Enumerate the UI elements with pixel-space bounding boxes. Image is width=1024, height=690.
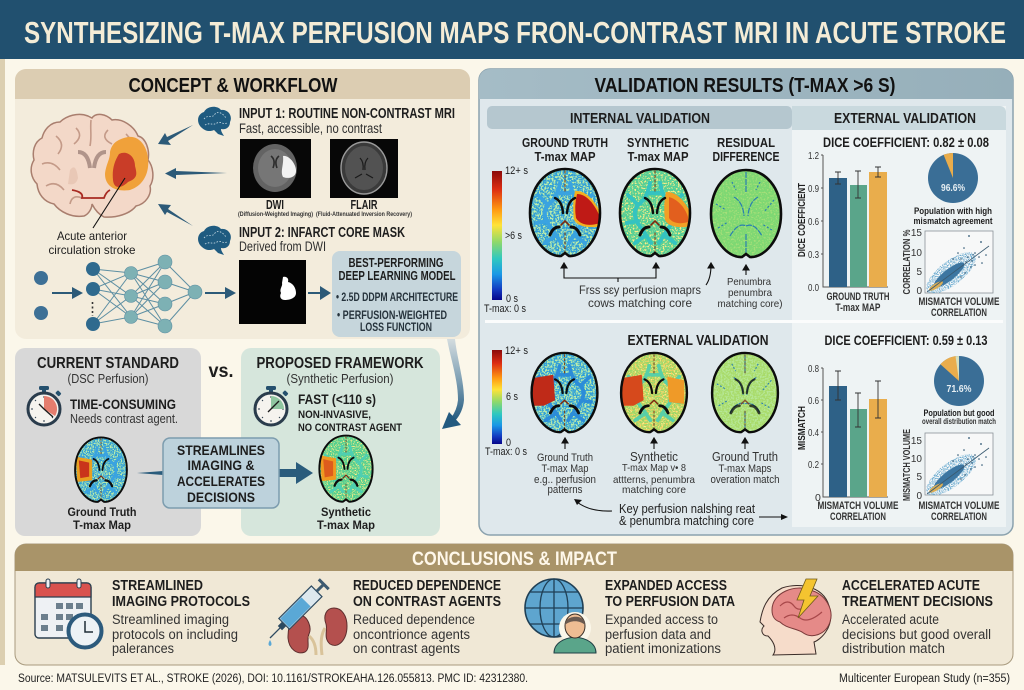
text: fast, non-invasive: FAST (<110 s)	[298, 392, 376, 407]
diagram: neural network	[34, 255, 202, 333]
colour scale: internal: T-max: 0 s	[484, 303, 526, 315]
scatter plot: mismatch volume	[902, 429, 1000, 523]
arrow: ground truth to synthetic	[137, 462, 313, 484]
caption: internal perfusion maps	[579, 283, 701, 310]
image: infarct core mask	[239, 260, 306, 324]
input 1 text: INPUT 1: ROUTINE NON-CONTRAST MRI	[239, 106, 455, 122]
text: reduced dependence: oncontrionce agents	[353, 627, 470, 642]
heading: proposed framework	[256, 355, 424, 386]
text: accelerated acute: Accelerated acute	[842, 612, 939, 627]
text: expanded access: Expanded access to	[605, 612, 718, 627]
text: reduced dependence: Reduced dependence	[353, 612, 475, 627]
icon: calendar and clock	[35, 579, 102, 648]
colour scale: external	[485, 345, 528, 458]
label: vs: vs.	[208, 361, 234, 382]
bar chart: dice coefficient: T-max MAP	[836, 302, 880, 314]
text: reduced dependence: on contrast agents	[353, 641, 460, 656]
text: fast, non-invasive	[298, 392, 402, 434]
scatter plot: mismatch volume: CORRELATION	[931, 511, 987, 523]
heading: current standard	[37, 355, 179, 386]
colour scale: internal: >6 s	[505, 230, 522, 242]
caption: external ground truth: patterns	[548, 484, 583, 496]
brain map: ground truth thumbnail	[74, 436, 128, 503]
icon: head with lightning brain	[760, 579, 831, 655]
annotation: key perfusion	[574, 499, 788, 528]
caption: ground truth map	[68, 505, 136, 532]
caption: penumbra: penumbra	[728, 287, 772, 299]
footer: study note: Multicenter European Study (n=355)	[839, 673, 1010, 685]
brain map: synthetic thumbnail	[318, 434, 374, 503]
bar chart: dice coefficient	[797, 150, 890, 314]
scatter plot: correlation: 10	[911, 248, 922, 259]
bar chart: mismatch: 0.6	[808, 395, 819, 407]
callout: best-performing model	[332, 251, 461, 337]
text: expanded access: patient imonizations	[605, 641, 721, 656]
heading: conclusions: CONCLUSIONS & IMPACT	[412, 549, 617, 570]
pie chart: 96.6%: Population with high	[914, 206, 992, 217]
caption: synthetic map	[317, 505, 375, 532]
input 2 text	[239, 225, 405, 254]
scatter plot: correlation: 5	[916, 267, 922, 278]
panel: concept and workflow	[15, 69, 470, 339]
metrics: internal dice headline: DICE COEFFICIENT: 0.82 ± 0.08	[823, 135, 989, 150]
callout: best-performing model: DEEP LEARNING MODEL	[338, 268, 456, 283]
bar: external validation	[792, 106, 1006, 130]
label: acute anterior circulation stroke	[48, 229, 136, 257]
brain map: internal ground truth	[528, 168, 602, 258]
scan captions: (Fluid-Attenuated Inversion Recovery)	[316, 211, 412, 218]
icon: syringe and kidneys	[265, 579, 347, 655]
bar: external validation: EXTERNAL VALIDATION	[834, 111, 976, 127]
annotation: external up arrows	[562, 438, 748, 449]
scatter plot: mismatch volume: 15	[911, 436, 922, 447]
caption: external ground truth	[534, 452, 596, 496]
icon: brain input 1	[198, 107, 231, 136]
heading: proposed framework: (Synthetic Perfusion)	[286, 372, 394, 386]
map headings: internal: DIFFERENCE	[712, 149, 780, 164]
text: expanded access: EXPANDED ACCESS	[605, 578, 727, 594]
caption: external ground truth: e.g.. perfusion	[534, 474, 596, 486]
scatter plot: correlation: MISMATCH VOLUME	[918, 296, 1000, 308]
metrics: external dice headline: DICE COEFFICIENT: 0.59 ± 0.13	[824, 333, 988, 348]
bar: internal validation: INTERNAL VALIDATION	[570, 111, 710, 127]
illustration: stroke brain	[31, 114, 153, 228]
caption: external synthetic: Synthetic	[630, 449, 678, 464]
callout: streamlines imaging: DECISIONS	[187, 489, 255, 505]
caption: external overlap: overation match	[710, 474, 780, 486]
divider between internal and external rows	[485, 320, 1003, 323]
bar chart: dice coefficient: 0.9	[808, 183, 819, 195]
pie chart: 71.6%	[922, 356, 996, 426]
text: streamlined imaging: palerances	[112, 641, 174, 656]
text: accelerated acute: TREATMENT DECISIONS	[842, 594, 993, 610]
pie chart: 71.6%: overall distribution match	[922, 417, 996, 426]
caption: synthetic map: Synthetic	[321, 505, 371, 519]
callout: streamlines imaging	[163, 438, 279, 508]
pie chart: 71.6%: Population but good	[924, 408, 995, 419]
scatter plot: mismatch volume: 10	[911, 454, 922, 465]
text: fast, non-invasive: NON-INVASIVE,	[298, 409, 371, 421]
bar chart: dice coefficient: 0.6	[808, 216, 819, 228]
caption: internal perfusion maps: Frss sɛy perfusion maprs	[579, 283, 701, 297]
colour scale: external: 12+ s	[505, 345, 528, 357]
heading: proposed framework: PROPOSED FRAMEWORK	[256, 355, 424, 372]
brain map: internal synthetic	[618, 168, 692, 258]
scatter plot: mismatch volume: MISMATCH VOLUME	[902, 429, 913, 501]
brain map: internal residual	[710, 168, 782, 258]
text: accelerated acute: ACCELERATED ACUTE	[842, 578, 980, 594]
text: expanded access: TO PERFUSION DATA	[605, 594, 735, 610]
brain map: external synthetic	[620, 352, 688, 434]
caption: external synthetic: T-max Map v• 8	[622, 462, 686, 474]
bar chart: dice coefficient: DICE COEFFICIENT	[797, 183, 808, 257]
text: expanded access	[605, 578, 735, 656]
text: time-consuming: Needs contrast agent.	[70, 412, 178, 426]
icon: globe and person	[525, 579, 596, 653]
text: accelerated acute: distribution match	[842, 641, 945, 656]
footer: source: Source: MATSULEVITS ET AL., STROKE (2026), DOI: 10.1161/STROKEAHA.126.055813. PMC ID: 42312380.	[18, 673, 528, 685]
bar chart: dice coefficient: 1.2	[808, 150, 819, 162]
panel: conclusions and impact	[15, 544, 1013, 665]
caption: internal perfusion maps: cows matching core	[588, 296, 692, 310]
bar chart: dice coefficient: 0.3	[808, 249, 819, 261]
scatter plot: correlation	[902, 228, 1000, 319]
caption: ground truth map: Ground Truth	[68, 505, 136, 519]
annotation: key perfusion: & penumbra matching core	[619, 514, 754, 528]
map headings: internal: SYNTHETIC	[627, 135, 690, 150]
icon: brain input 2	[198, 226, 231, 255]
bar chart: mismatch: MISMATCH VOLUME	[818, 500, 898, 512]
caption: synthetic map: T-max Map	[317, 518, 375, 532]
bar chart: mismatch: 0.4	[808, 427, 819, 439]
heading: current standard: (DSC Perfusion)	[68, 372, 148, 386]
caption: external synthetic	[613, 449, 695, 496]
caption: external overlap: T-max Maps	[718, 463, 772, 475]
colour scale: internal	[484, 165, 528, 315]
text: reduced dependence	[353, 578, 501, 656]
arrows through network	[52, 286, 331, 300]
map headings: internal: T-max MAP	[628, 149, 689, 164]
caption: penumbra: matching core)	[718, 298, 782, 310]
text: reduced dependence: ON CONTRAST AGENTS	[353, 594, 501, 610]
input 1 text	[239, 106, 455, 136]
pie chart: 96.6%	[914, 153, 993, 227]
pie chart: 96.6%: 96.6%	[941, 182, 966, 194]
pie chart: 96.6%: mismatch agreement	[914, 216, 993, 227]
caption: external overlap: Ground Truth	[712, 449, 778, 464]
scan captions: DWI	[266, 198, 284, 212]
text: time-consuming	[70, 396, 178, 426]
caption: external synthetic: matching core	[622, 484, 686, 496]
scatter plot: correlation: CORRELATION %	[902, 229, 913, 294]
text: accelerated acute: decisions but good overall	[842, 627, 991, 642]
text: time-consuming: TIME-CONSUMING	[70, 396, 176, 412]
caption: penumbra: Penumbra	[727, 276, 771, 288]
scatter plot: correlation: CORRELATION	[931, 307, 987, 319]
text: expanded access: perfusion data and	[605, 627, 711, 642]
input 1 text: Fast, accessible, no contrast	[239, 121, 382, 136]
annotation: internal arrows	[561, 263, 749, 285]
colour scale: external: 0	[506, 437, 511, 449]
bar chart: mismatch: 0.8	[808, 363, 819, 375]
caption: external ground truth: Ground Truth	[537, 452, 593, 464]
scatter plot: mismatch volume: MISMATCH VOLUME	[918, 500, 1000, 512]
text: streamlined imaging: IMAGING PROTOCOLS	[112, 594, 250, 610]
bar chart: mismatch: MISMATCH	[797, 406, 808, 450]
heading: external validation row: EXTERNAL VALIDATION	[628, 333, 768, 349]
scatter plot: correlation: 15	[911, 228, 922, 239]
pie chart: 71.6%: 71.6%	[946, 383, 972, 395]
map headings: internal: GROUND TRUTH	[522, 135, 608, 150]
scan captions	[238, 198, 412, 218]
sub-panel background: metrics column	[792, 106, 1006, 527]
text: fast, non-invasive: NO CONTRAST AGENT	[298, 422, 402, 434]
heading: concept and workflow: CONCEPT & WORKFLOW	[128, 74, 338, 97]
heading: current standard: CURRENT STANDARD	[37, 355, 179, 372]
input 2 text: Derived from DWI	[239, 239, 326, 254]
left edge strip	[0, 59, 5, 665]
text: streamlined imaging: Streamlined imaging	[112, 612, 229, 627]
heading: validation results: VALIDATION RESULTS (T-MAX >6 S)	[594, 74, 896, 97]
scatter plot: mismatch volume: 5	[916, 472, 922, 483]
icon: stopwatch time-consuming	[28, 386, 62, 425]
caption: penumbra	[718, 276, 782, 310]
bar chart: mismatch: 0.2	[808, 459, 819, 471]
text: reduced dependence: REDUCED DEPENDENCE	[353, 578, 501, 594]
bar: internal validation	[487, 106, 792, 129]
callout: streamlines imaging: IMAGING &	[188, 457, 254, 473]
callout: best-performing model: • PERFUSION-WEIGHTED	[337, 310, 447, 322]
colour scale: internal: 12+ s	[505, 165, 528, 177]
icon: stopwatch fast	[255, 386, 289, 425]
arrow: model to proposed framework	[442, 339, 464, 429]
input 2 text: INPUT 2: INFARCT CORE MASK	[239, 225, 405, 241]
map headings: internal: RESIDUAL	[717, 135, 775, 150]
arrows toward brain	[158, 125, 227, 226]
caption: external overlap	[710, 449, 780, 486]
colour scale: external: T-max: 0 s	[485, 446, 527, 458]
image: FLAIR scan	[330, 139, 398, 198]
callout: best-performing model: • 2.5D DDPM ARCHITECTURE	[336, 292, 458, 304]
brain map: external residual	[710, 352, 780, 434]
panel: proposed framework	[241, 348, 440, 536]
scan captions: FLAIR	[350, 198, 378, 212]
text: streamlined imaging: protocols on including	[112, 627, 238, 642]
annotation: key perfusion: Key perfusion nalshing reat	[619, 502, 755, 516]
bar chart: dice coefficient: GROUND TRUTH	[826, 291, 890, 303]
brain map: external ground truth	[530, 352, 599, 434]
colour scale: external: 6 s	[506, 391, 518, 403]
callout: streamlines imaging: STREAMLINES	[177, 442, 265, 458]
text: streamlined imaging	[112, 578, 250, 656]
bar chart: mismatch: 0	[815, 492, 821, 504]
scatter plot: correlation: 0	[916, 286, 922, 297]
map headings: internal	[522, 135, 780, 164]
bar chart: mismatch	[797, 363, 898, 523]
callout: streamlines imaging: ACCELERATES	[177, 473, 265, 489]
map headings: internal: T-max MAP	[534, 149, 596, 164]
scatter plot: mismatch volume: 0	[916, 491, 922, 502]
colour scale: internal: 0 s	[506, 293, 518, 305]
header: title banner	[0, 0, 1024, 59]
image: DWI scan	[240, 139, 311, 198]
label: acute anterior circulation stroke: Acute anterior	[57, 229, 127, 243]
text: streamlined imaging: STREAMLINED	[112, 578, 203, 594]
callout: best-performing model: BEST-PERFORMING	[348, 255, 444, 270]
caption: external synthetic: attterns, penumbra	[613, 474, 695, 486]
bar chart: mismatch: CORRELATION	[830, 511, 886, 523]
bar chart: dice coefficient: 0.0	[808, 282, 819, 294]
callout: best-performing model: LOSS FUNCTION	[360, 322, 432, 334]
caption: external ground truth: T-max Map	[542, 463, 588, 475]
text: accelerated acute	[842, 578, 993, 656]
panel: validation results	[479, 69, 1013, 535]
scan captions: (Diffusion-Weighted Imaging)	[238, 211, 313, 218]
panel: current standard	[15, 348, 201, 536]
label: acute anterior circulation stroke: circulation stroke	[48, 243, 136, 257]
caption: ground truth map: T-max Map	[73, 518, 131, 532]
